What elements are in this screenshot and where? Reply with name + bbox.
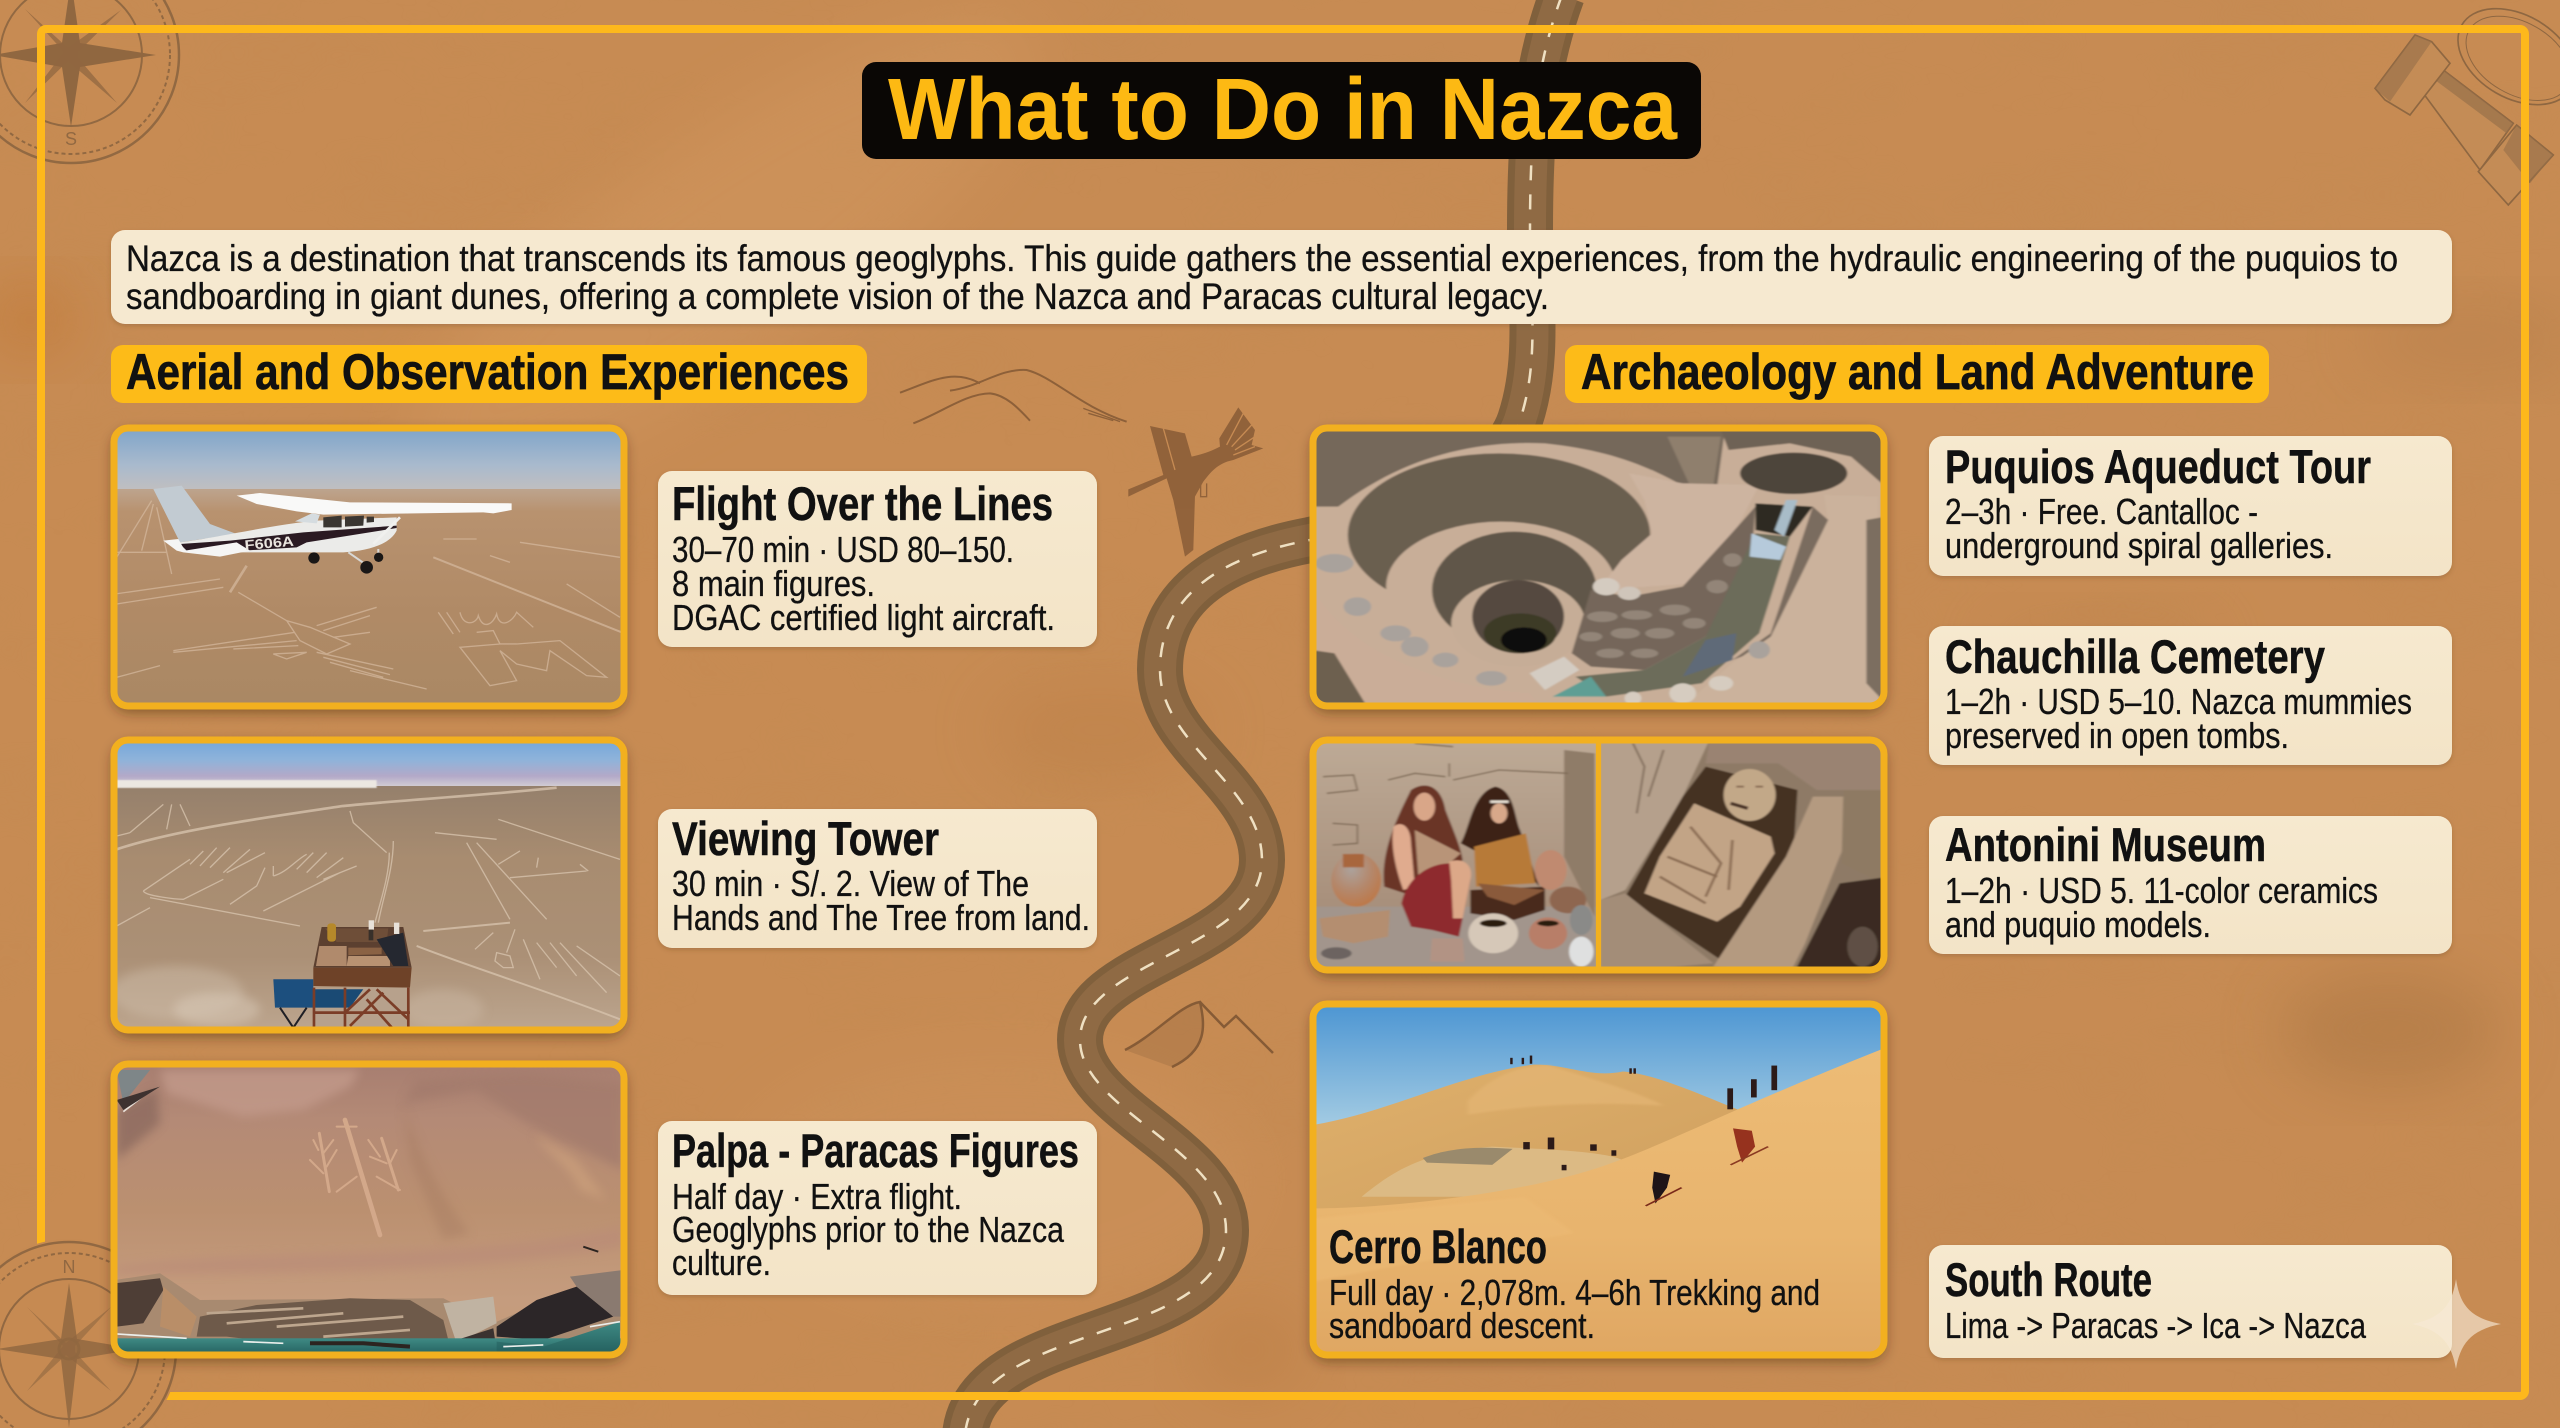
icon: compass top left: [0, 0, 179, 163]
photo: plane over the lines: F606A: [244, 533, 294, 553]
photo: Cerro Blanco dunes: [1304, 1001, 1900, 1361]
card: flight over the lines: [658, 471, 1097, 647]
card: Chauchilla cemetery: Chauchilla Cemetery: [1945, 630, 2325, 683]
intro text block: sandboarding in giant dunes, offering a complete vision of the Nazca and Paracas cultural legacy.: [126, 276, 1549, 317]
card: puquios aqueduct tour: [1929, 436, 2452, 576]
icon: sparkle: [2412, 1279, 2501, 1369]
photo: puquios spiral aqueduct: [1300, 420, 1900, 720]
card: Antonini museum: 1–2h · USD 5. 11-color ceramics: [1945, 870, 2378, 911]
card: flight over the lines: DGAC certified light aircraft.: [672, 597, 1055, 638]
card: puquios aqueduct tour: 2–3h · Free. Cantalloc -: [1945, 491, 2258, 532]
card: Palpa - Paracas figures: [658, 1121, 1097, 1295]
photo: Cerro Blanco dunes: Full day · 2,078m. 4–6h Trekking and: [1329, 1272, 1820, 1313]
card: Palpa - Paracas figures: Palpa - Paracas Figures: [672, 1124, 1079, 1177]
heading: archaeology and land adventure: Archaeology and Land Adventure: [1581, 344, 2254, 400]
photo: viewing tower: [110, 736, 630, 1032]
card: viewing tower: Viewing Tower: [672, 812, 939, 865]
card: Palpa - Paracas figures: Half day · Extra flight.: [672, 1176, 962, 1217]
card: south route: [1929, 1245, 2452, 1358]
photo: plane over the lines: [110, 424, 630, 716]
icon: small mountain: [1125, 1002, 1273, 1067]
icon: compass top left: S: [65, 129, 77, 149]
intro text block: [111, 230, 2452, 324]
card: south route: South Route: [1945, 1253, 2152, 1306]
card: Chauchilla cemetery: [1929, 626, 2452, 765]
card: puquios aqueduct tour: Puquios Aqueduct Tour: [1945, 440, 2371, 493]
title: What to Do in Nazca: [888, 61, 1678, 158]
card: viewing tower: [658, 809, 1097, 948]
icon: compass bottom left: N: [62, 1257, 76, 1277]
photo: Palpa and Paracas figures: [110, 1060, 630, 1360]
heading: aerial and observation experiences: Aerial and Observation Experiences: [126, 344, 849, 400]
photo: Cerro Blanco dunes: sandboard descent.: [1329, 1305, 1595, 1346]
card: south route: Lima -> Paracas -> Ica -> Nazca: [1945, 1305, 2367, 1346]
icon: spyglass top right: [2375, 0, 2560, 205]
card: Palpa - Paracas figures: culture.: [672, 1242, 771, 1283]
card: viewing tower: Hands and The Tree from land.: [672, 897, 1090, 938]
card: Palpa - Paracas figures: Geoglyphs prior to the Nazca: [672, 1209, 1065, 1250]
card: puquios aqueduct tour: underground spiral galleries.: [1945, 525, 2333, 566]
card: flight over the lines: 8 main figures.: [672, 563, 875, 604]
icon: mountain line sketch: [900, 370, 1127, 423]
card: flight over the lines: Flight Over the Lines: [672, 477, 1053, 530]
photo: Cerro Blanco dunes: Cerro Blanco: [1329, 1220, 1547, 1273]
card: Chauchilla cemetery: preserved in open tombs.: [1945, 715, 2289, 756]
card: viewing tower: 30 min · S/. 2. View of The: [672, 863, 1029, 904]
card: flight over the lines: 30–70 min · USD 80–150.: [672, 529, 1014, 570]
road: [965, 0, 1562, 1428]
icon: Nazca bird geoglyph: [1128, 407, 1263, 557]
card: Antonini museum: [1929, 816, 2452, 954]
photo: Chauchilla mummies: [1311, 738, 1891, 973]
icon: compass bottom left: [0, 1239, 179, 1428]
card: Chauchilla cemetery: 1–2h · USD 5–10. Nazca mummies: [1945, 681, 2412, 722]
card: Antonini museum: and puquio models.: [1945, 904, 2211, 945]
card: Antonini museum: Antonini Museum: [1945, 818, 2266, 871]
